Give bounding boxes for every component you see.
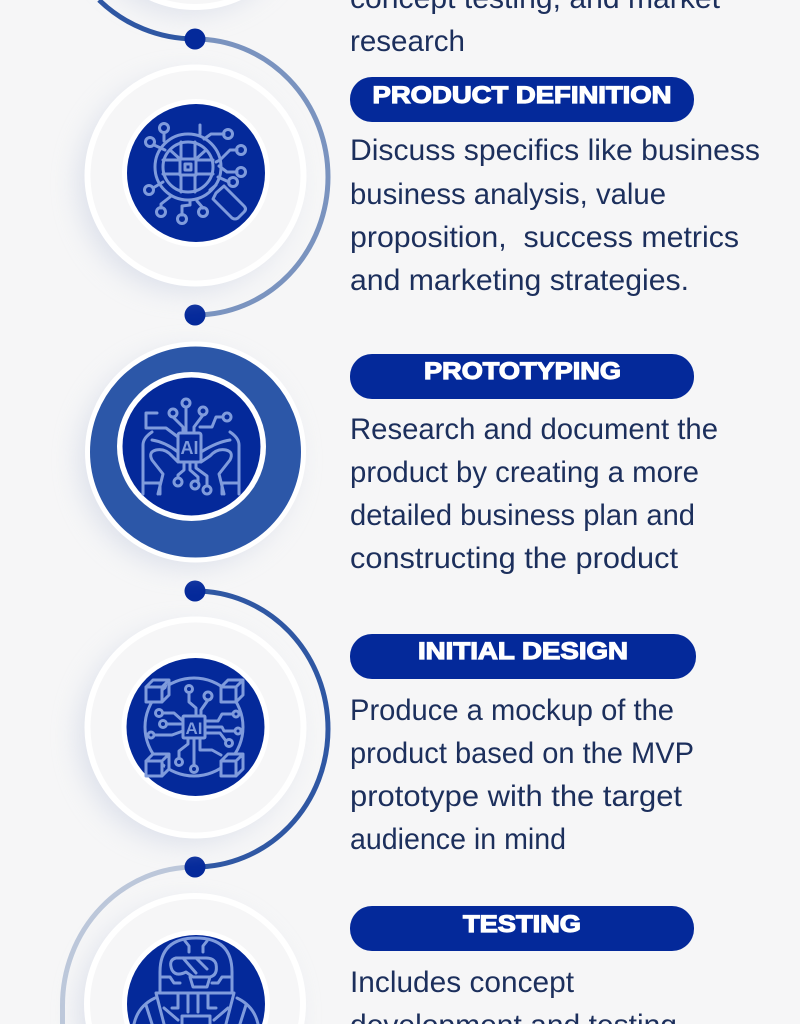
connector arc: testing [62,867,195,1024]
heading: initial design [350,634,696,679]
text block: prototyping [350,413,718,575]
connector arc: previous stage [99,0,195,39]
icon: AI chip network with cubes [145,678,243,776]
node dot 2 [184,304,206,326]
icon: robot with circuit helmet [134,938,258,1024]
text block: prototyping: product by creating a more [350,456,699,489]
icon: AI chip held by two hands [143,399,239,494]
text block: prototyping: constructing the product [350,542,679,575]
icon: AI chip network with cubes: AI [186,719,202,738]
connector arc: initial design [195,591,328,867]
text block: prototyping: Research and document the [350,413,718,446]
icon: chip under magnifying glass [144,124,246,224]
text block: initial design [350,694,694,856]
text block: product definition [350,134,760,297]
panel: testing badge (cropped) [78,896,303,1024]
text block: initial design: prototype with the target [350,780,683,813]
panel: prototyping badge [79,344,304,568]
heading: product definition: PRODUCT DEFINITION [372,82,672,109]
icon: AI chip held by two hands: AI [180,438,198,458]
text block: initial design: Produce a mockup of the [350,694,674,727]
panel: previous stage circle (cropped) [79,0,303,15]
text block: testing: Includes concept [350,966,575,999]
text block: product definition: business analysis, value [350,178,666,211]
text block: prototyping: detailed business plan and [350,499,695,532]
text block: initial design: audience in mind [350,823,566,856]
panel: product definition badge [78,68,304,292]
text block: product definition: Discuss specifics like business [350,134,760,167]
text block: product definition: and marketing strategies. [350,264,689,297]
text block: testing [350,966,677,1024]
text block: initial design: product based on the MVP [350,737,694,770]
heading: prototyping [350,354,694,399]
heading: prototyping: PROTOTYPING [424,358,621,385]
heading: initial design: INITIAL DESIGN [418,638,628,665]
connector arc: product definition [195,39,328,315]
heading: product definition [350,77,694,122]
heading: testing: TESTING [463,911,581,938]
node dot 4 [184,856,206,878]
node dot 1 [184,28,206,50]
node dot 3 [184,580,206,602]
heading: testing [350,906,694,951]
text block: product definition: proposition, success metrics [350,221,739,254]
text block: previous stage [350,0,721,58]
panel: initial design badge [78,620,304,844]
text block: previous stage: research [350,25,465,58]
